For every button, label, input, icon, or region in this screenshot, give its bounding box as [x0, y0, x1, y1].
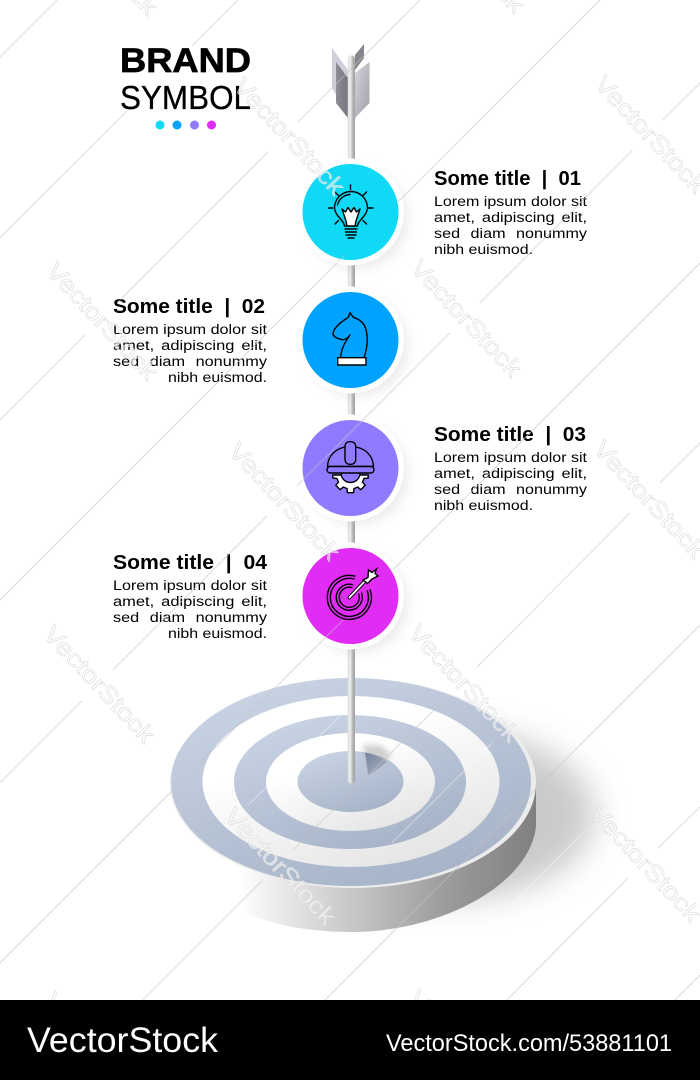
body 01: amet, adipiscing elit, — [434, 210, 587, 225]
title line one: BRAND — [120, 42, 251, 80]
body 03: Lorem ipsum dolor sit — [434, 450, 587, 465]
bullseye — [298, 751, 404, 812]
watermarks: VectorStock — [588, 436, 700, 565]
footer logo: VectorStock — [27, 1021, 219, 1060]
heading 04: Some title | 04 — [113, 552, 268, 574]
footer bar — [0, 1000, 700, 1080]
heading 03: Some title | 03 — [434, 424, 586, 446]
fin front right — [355, 62, 370, 118]
ring two — [202, 696, 500, 867]
ring three — [234, 715, 466, 849]
ring four — [266, 733, 435, 831]
text block 03 — [434, 424, 587, 513]
body 04: amet, adipiscing elit, — [113, 594, 267, 609]
icon: chess knight — [333, 313, 367, 365]
title — [120, 42, 251, 116]
body 02: Lorem ipsum dolor sit — [113, 322, 267, 337]
body 03: sed diam nonummy — [434, 482, 587, 497]
body 01 — [434, 194, 587, 257]
watermarks: VectorStock — [584, 800, 700, 929]
text block 04 — [113, 552, 268, 641]
heading 01: Some title | 01 — [434, 168, 581, 190]
fin back left — [332, 48, 348, 118]
step 4 circle — [297, 542, 407, 652]
title dots — [156, 120, 216, 130]
body 02: sed diam nonummy — [113, 354, 267, 369]
watermarks: VectorStock — [589, 71, 700, 200]
body 04: sed diam nonummy — [113, 610, 267, 625]
body 01: sed diam nonummy — [434, 226, 587, 241]
title line two: SYMBOL — [120, 79, 251, 116]
watermarks: VectorStock — [405, 255, 527, 384]
target board — [170, 678, 536, 932]
target shadow — [305, 730, 595, 900]
fin front left — [336, 62, 348, 118]
arrow shadow soft — [362, 745, 392, 770]
watermarks: VectorStock — [228, 73, 350, 202]
step 1 circle — [297, 158, 407, 268]
text block 01 — [434, 168, 587, 257]
body 04 — [113, 578, 267, 641]
body 01: Lorem ipsum dolor sit — [434, 194, 587, 209]
body 01: nibh euismod. — [434, 242, 533, 257]
arrow — [332, 44, 370, 784]
watermarks: VectorStock — [223, 438, 345, 567]
fin back right — [355, 44, 364, 70]
body 02: amet, adipiscing elit, — [113, 338, 267, 353]
step 2 circle — [297, 286, 407, 396]
icon: target with arrow — [327, 569, 378, 619]
outer ring — [171, 678, 531, 886]
body 03: amet, adipiscing elit, — [434, 466, 587, 481]
board side — [236, 785, 536, 932]
body 02 — [113, 322, 267, 385]
heading 02: Some title | 02 — [113, 296, 265, 318]
watermarks: VectorStock — [41, 258, 163, 387]
body 03: nibh euismod. — [434, 498, 533, 513]
icon: light bulb — [328, 185, 373, 238]
body 02: nibh euismod. — [168, 370, 267, 385]
watermarks: VectorStock — [403, 620, 525, 749]
step 3 circle — [297, 414, 407, 524]
icon: helmet and gear — [327, 442, 374, 493]
body 03 — [434, 450, 587, 513]
board lip — [170, 678, 536, 888]
text block 02 — [113, 296, 267, 385]
watermarks: VectorStock — [219, 803, 341, 932]
body 04: Lorem ipsum dolor sit — [113, 578, 267, 593]
shaft — [348, 55, 355, 784]
footer id: VectorStock.com/53881101 — [386, 1030, 672, 1057]
body 04: nibh euismod. — [168, 626, 267, 641]
bullseye top patch — [365, 752, 387, 776]
watermarks: VectorStock — [38, 621, 160, 750]
